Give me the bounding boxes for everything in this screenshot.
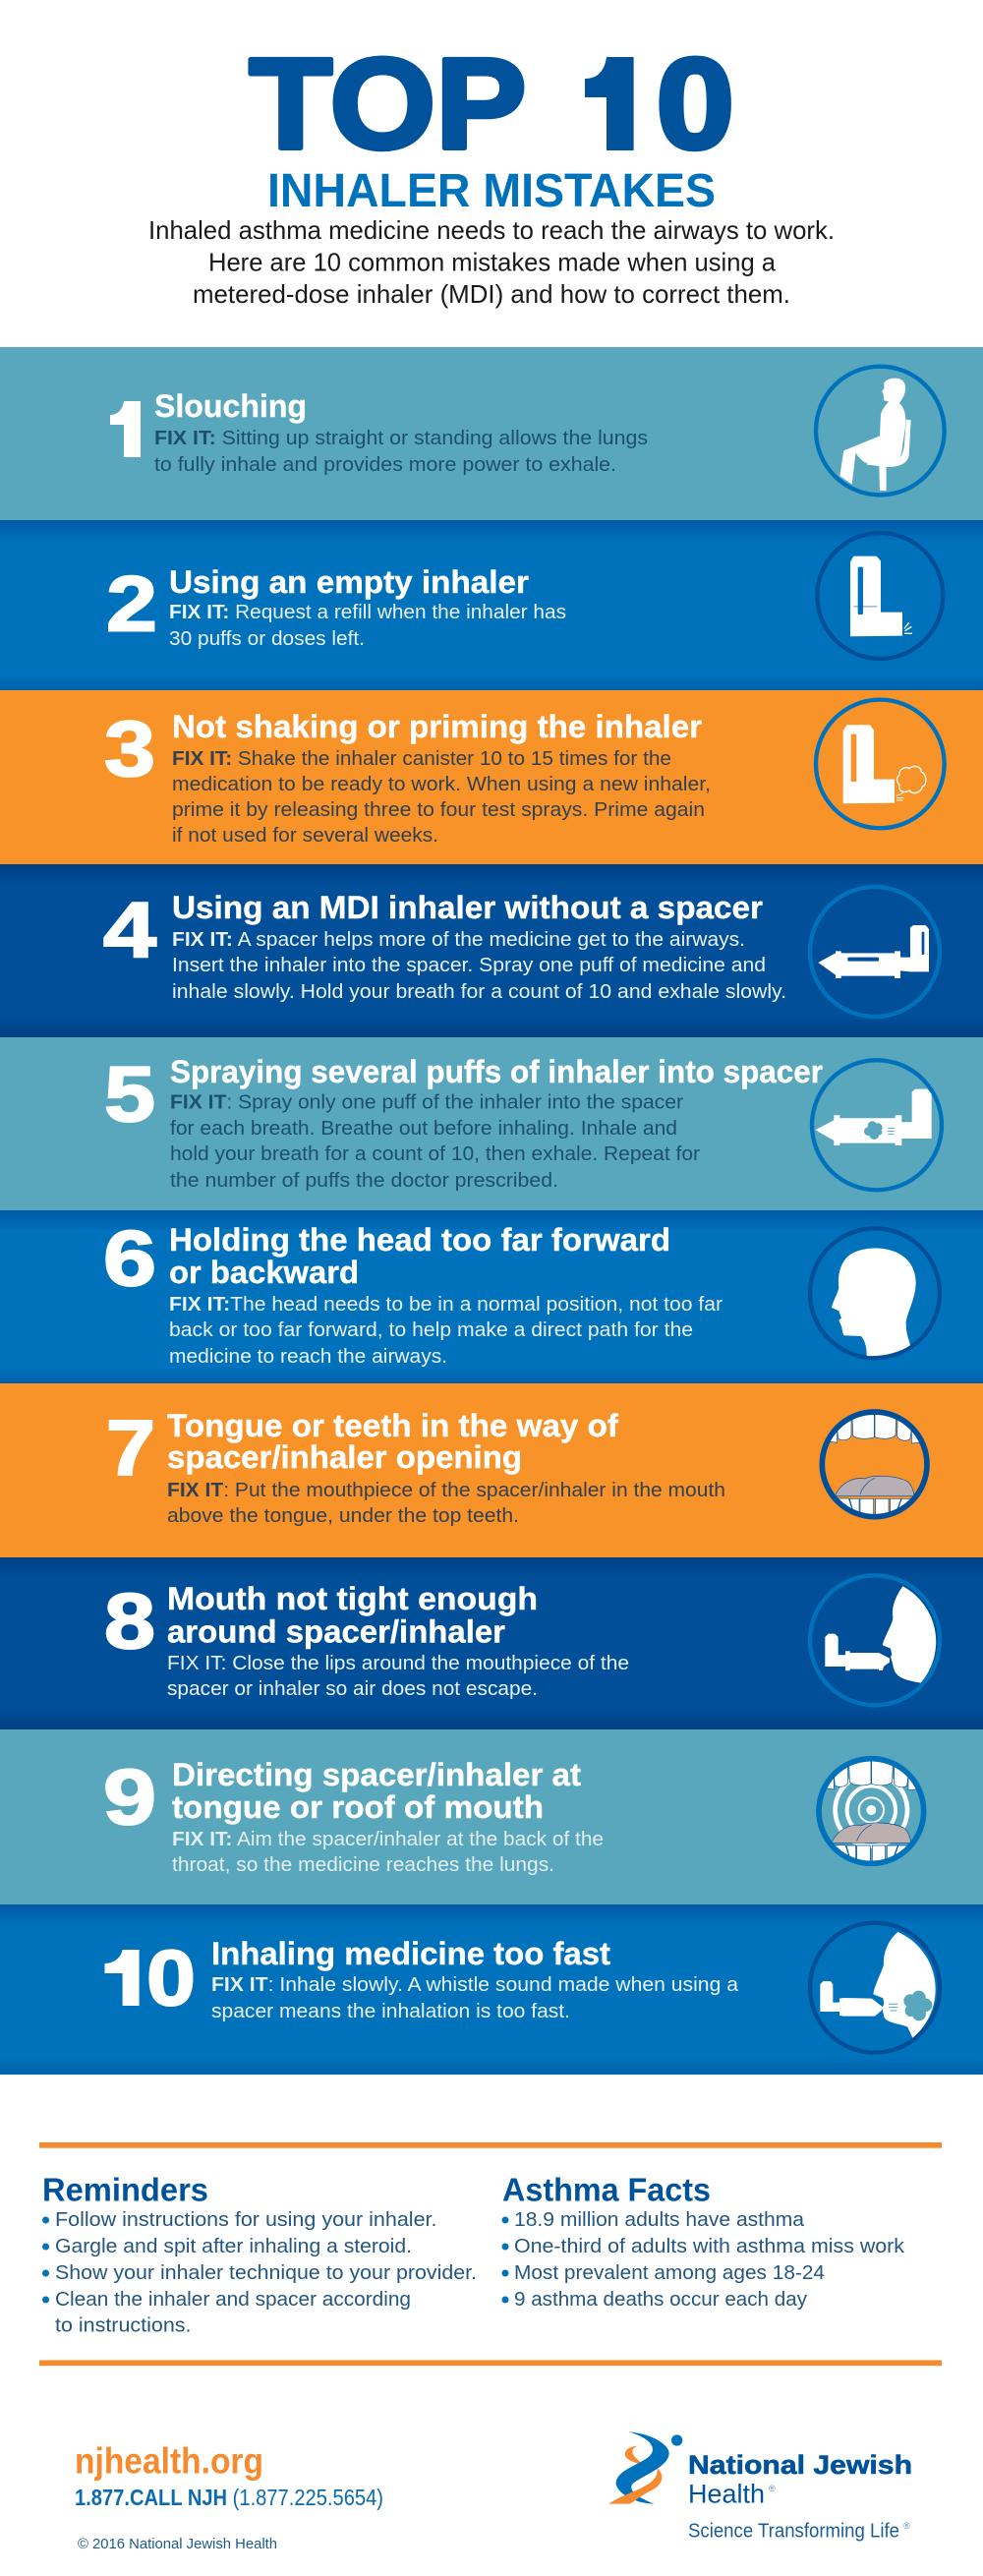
panel: mistake 2 (0, 520, 983, 690)
title: TOP (250, 31, 527, 175)
fix text 1 (154, 428, 648, 476)
fix text 3 (172, 748, 711, 847)
icon: open mouth (822, 1406, 927, 1521)
fix text 2: FIX IT: Request a refill when the inhaler has (169, 602, 566, 623)
icon: face with spacer (810, 1575, 940, 1705)
facts list: 18.9 million adults have asthma (514, 2209, 805, 2231)
heading 7: Tongue or teeth in the way of (167, 1408, 618, 1443)
heading 8 (167, 1581, 538, 1650)
heading 6: or backward (169, 1255, 359, 1290)
panel: mistake 7 (0, 1383, 983, 1557)
title: 1 (608, 33, 632, 175)
heading 10: Inhaling medicine too fast (211, 1936, 610, 1971)
fix text 4: inhale slowly. Hold your breath for a count of 10 and exhale slowly. (172, 981, 786, 1003)
intro text: Here are 10 common mistakes made when using a (208, 248, 777, 277)
icon: inhaler without spacer (810, 887, 940, 1017)
heading 9: tongue or roof of mouth (172, 1789, 544, 1825)
fix text 1: to fully inhale and provides more power to exhale. (154, 454, 616, 476)
panel: mistake 10 (0, 1904, 983, 2075)
logo wordmark: National Jewish (688, 2450, 912, 2480)
logo wordmark: ® (769, 2484, 776, 2493)
panel: mistake 9 (0, 1729, 983, 1904)
fix text 5 (170, 1091, 700, 1192)
fix text 7: FIX IT: Put the mouthpiece of the spacer/inhaler in the mouth (167, 1480, 725, 1501)
subtitle: INHALER MISTAKES (267, 165, 716, 217)
intro text: metered-dose inhaler (MDI) and how to correct them. (193, 279, 790, 309)
icon: spraying into spacer (812, 1060, 942, 1190)
fix text 5: FIX IT: Spray only one puff of the inhaler into the spacer (170, 1091, 683, 1113)
icon: priming inhaler (816, 700, 945, 828)
facts list: One-third of adults with asthma miss work (514, 2236, 905, 2257)
fix text 5: hold your breath for a count of 10, then exhale. Repeat for (170, 1143, 700, 1165)
icon: head profile (810, 1228, 940, 1358)
icon: seated person (816, 367, 945, 495)
logo (608, 2431, 912, 2543)
icon: face inhaling too fast (810, 1923, 940, 2053)
number 8: 8 (104, 1577, 155, 1665)
heading 1: Slouching (154, 388, 307, 424)
copyright: © 2016 National Jewish Health (78, 2536, 277, 2552)
intro text: Inhaled asthma medicine needs to reach the airways to work. (148, 215, 835, 245)
panel: mistake 3 (0, 690, 983, 864)
fix text 5: for each breath. Breathe out before inhaling. Inhale and (170, 1118, 677, 1140)
reminders list: Clean the inhaler and spacer according (55, 2289, 411, 2311)
fix text 4: FIX IT: A spacer helps more of the medicine get to the airways. (172, 929, 745, 951)
heading 9 (172, 1757, 581, 1825)
panel: mistake 8 (0, 1557, 983, 1729)
panel: mistake 5 (0, 1037, 983, 1210)
fix text 9: FIX IT: Aim the spacer/inhaler at the back of the (172, 1829, 604, 1850)
fix text 8: spacer or inhaler so air does not escape. (167, 1678, 538, 1700)
number 2: 2 (106, 560, 157, 647)
fix text 9: throat, so the medicine reaches the lungs. (172, 1854, 554, 1876)
reminders heading: Reminders (42, 2171, 208, 2208)
facts list: Most prevalent among ages 18-24 (514, 2262, 825, 2284)
icon: empty inhaler (817, 533, 943, 659)
heading 6 (169, 1222, 670, 1290)
fix text 3: if not used for several weeks. (172, 825, 438, 847)
number 10: 0 (146, 1934, 196, 2021)
number 5: 5 (104, 1050, 155, 1138)
reminders list: Follow instructions for using your inhaler. (55, 2209, 437, 2231)
logo wordmark: Health (688, 2480, 765, 2509)
top divider (39, 2142, 942, 2148)
logo wordmark (688, 2450, 912, 2509)
number 1 (110, 385, 141, 473)
fix text 8: FIX IT: Close the lips around the mouthpiece of the (167, 1653, 629, 1674)
fix text 2 (169, 602, 566, 650)
reminders list: Gargle and spit after inhaling a steroid. (55, 2236, 412, 2257)
phone: 1.877.CALL NJH (1.877.225.5654) (75, 2485, 383, 2510)
panel: asthma facts (501, 2171, 905, 2311)
reminders list: Show your inhaler technique to your provider. (55, 2262, 477, 2284)
fix text 6: FIX IT:The head needs to be in a normal position, not too far (169, 1294, 723, 1316)
panel: reminders (42, 2171, 477, 2336)
number 10 (104, 1934, 196, 2021)
number 7: 7 (106, 1404, 155, 1492)
icon: mouth with target (819, 1753, 924, 1867)
fix text 3: prime it by releasing three to four test sprays. Prime again (172, 799, 705, 821)
website: njhealth.org (75, 2440, 263, 2482)
fix text 6 (169, 1294, 723, 1368)
fix text 5: the number of puffs the doctor prescribed. (170, 1170, 558, 1192)
fix text 3: FIX IT: Shake the inhaler canister 10 to 15 times for the (172, 748, 671, 770)
fix text 10: FIX IT: Inhale slowly. A whistle sound made when using a (211, 1974, 739, 1996)
fix text 3: medication to be ready to work. When using a new inhaler, (172, 774, 711, 795)
fix text 4: Insert the inhaler into the spacer. Spray one puff of medicine and (172, 955, 766, 976)
heading 8: Mouth not tight enough (167, 1581, 538, 1616)
panel: mistake 6 (0, 1210, 983, 1383)
number 4: 4 (103, 886, 157, 973)
number 3: 3 (104, 705, 155, 792)
heading 7: spacer/inhaler opening (167, 1439, 522, 1475)
bottom divider (39, 2360, 942, 2366)
logo mark: helix (608, 2431, 682, 2504)
fix text 7: above the tongue, under the top teeth. (167, 1505, 519, 1527)
heading 2: Using an empty inhaler (169, 564, 529, 600)
fix text 7 (167, 1480, 725, 1527)
facts list (501, 2209, 905, 2311)
reminders list (42, 2209, 477, 2336)
heading 6: Holding the head too far forward (169, 1222, 670, 1258)
fix text 6: medicine to reach the airways. (169, 1346, 447, 1368)
panel: mistake 4 (0, 864, 983, 1037)
heading 8: around spacer/inhaler (167, 1614, 505, 1650)
heading 5: Spraying several puffs of inhaler into spacer (170, 1054, 823, 1089)
heading 3: Not shaking or priming the inhaler (172, 709, 702, 744)
heading 4: Using an MDI inhaler without a spacer (172, 890, 763, 925)
fix text 8 (167, 1653, 629, 1700)
title: 0 (657, 31, 734, 175)
fix text 6: back or too far forward, to help make a direct path for the (169, 1319, 693, 1341)
heading 9: Directing spacer/inhaler at (172, 1757, 581, 1792)
number 9: 9 (103, 1753, 156, 1841)
reminders list: to instructions. (55, 2314, 191, 2336)
facts list: 9 asthma deaths occur each day (514, 2289, 807, 2311)
intro text (148, 215, 835, 309)
fix text 2: 30 puffs or doses left. (169, 628, 365, 650)
facts heading: Asthma Facts (502, 2171, 711, 2208)
fix text 9 (172, 1829, 604, 1876)
fix text 10: spacer means the inhalation is too fast. (211, 2001, 570, 2022)
number 10: 1 (124, 1934, 138, 2021)
fix text 4 (172, 929, 786, 1003)
logo tagline: ® (903, 2521, 910, 2531)
number 6: 6 (103, 1214, 156, 1302)
heading 7 (167, 1408, 618, 1475)
logo tagline: Science Transforming Life (688, 2521, 899, 2543)
fix text 1: FIX IT: Sitting up straight or standing allows the lungs (154, 428, 648, 449)
panel: mistake 1: 1 (125, 385, 140, 473)
panel: mistake 1 (0, 347, 983, 520)
fix text 10 (211, 1974, 739, 2022)
title (250, 31, 734, 175)
